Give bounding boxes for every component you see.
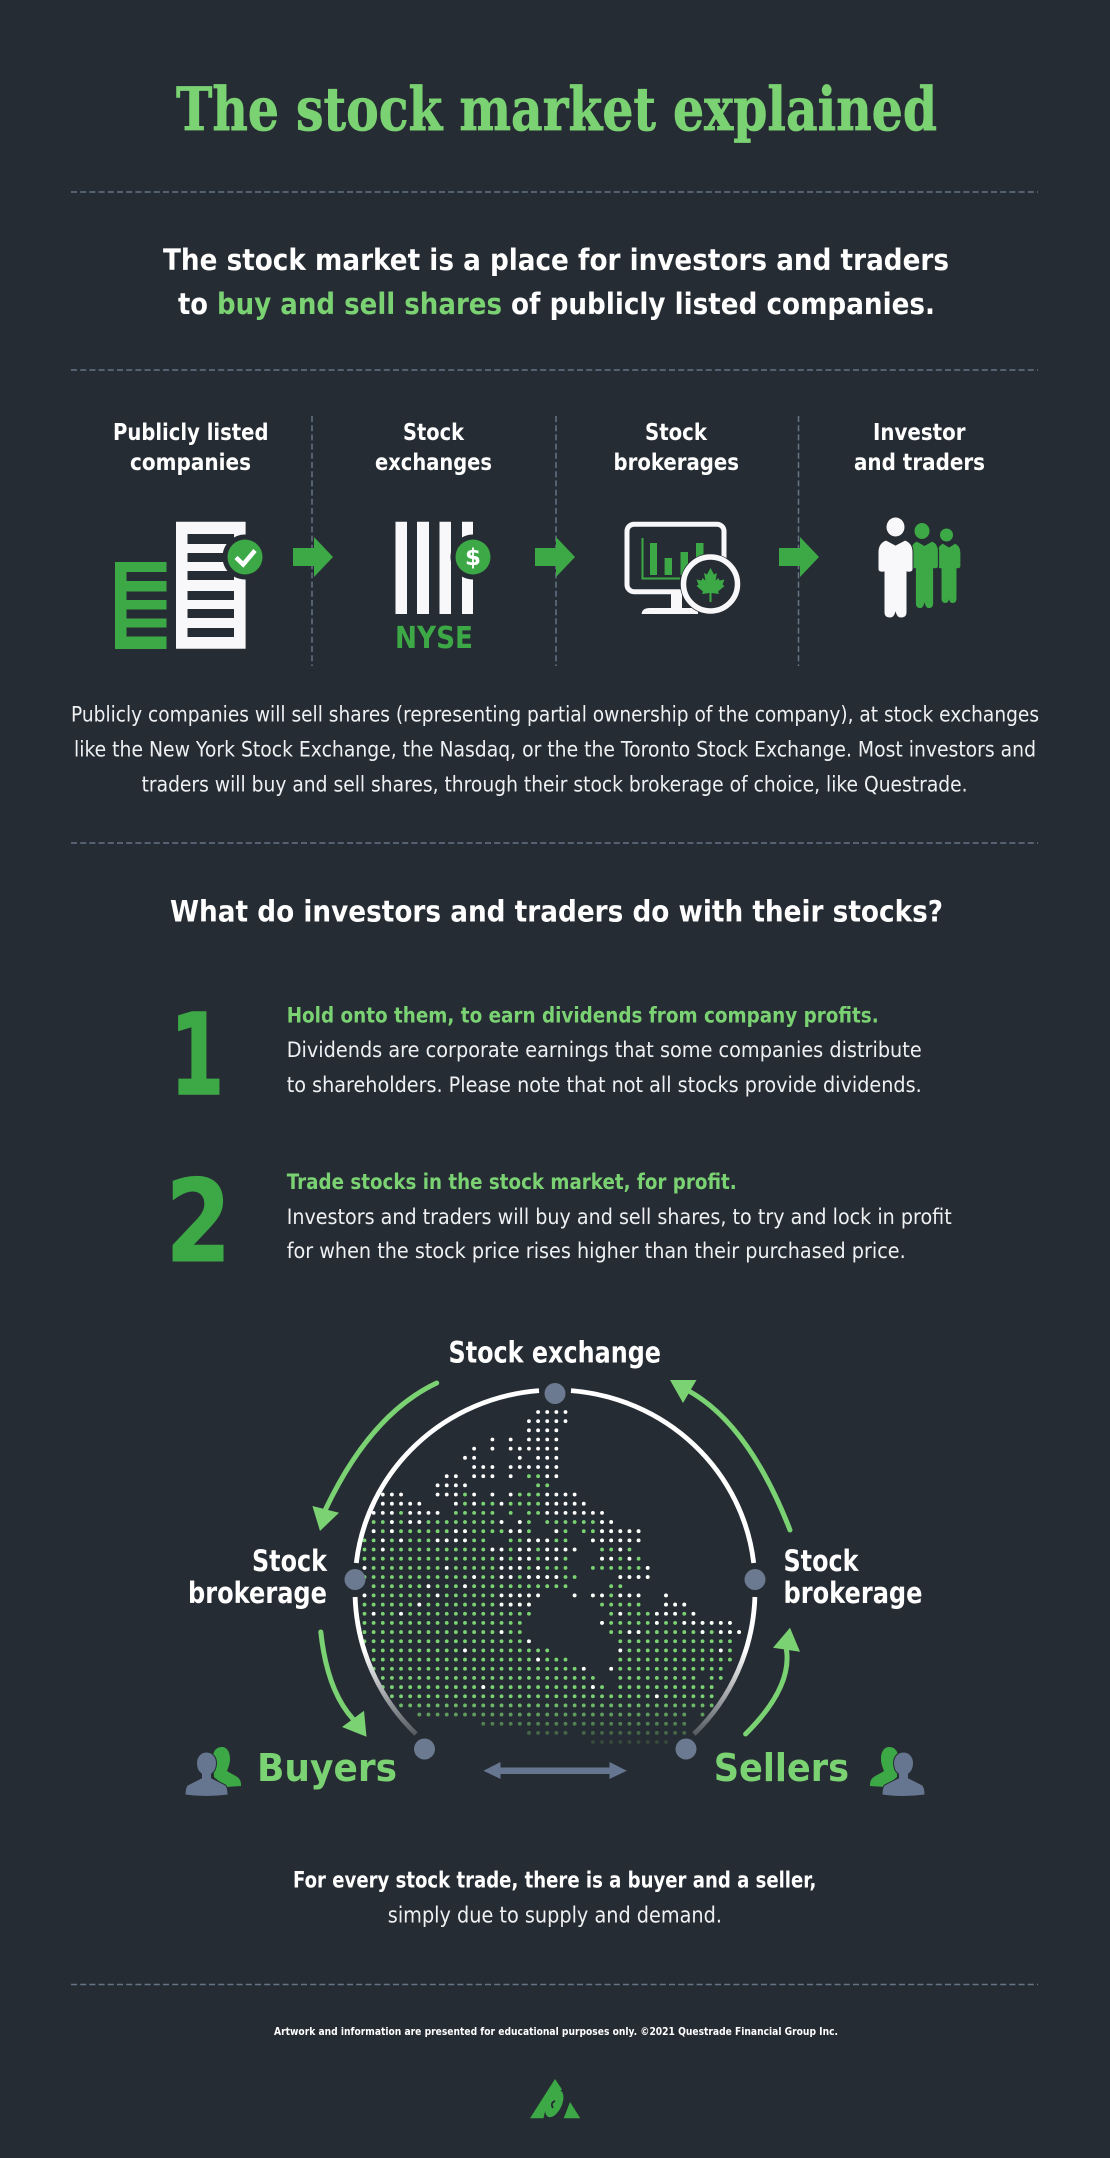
icon: company buildings with check (115, 522, 268, 649)
logo (530, 2079, 580, 2120)
icon: NYSE exchange columns: $ (465, 545, 481, 571)
number 2: 2 (166, 1155, 231, 1288)
panel: flow from companies to investors (113, 418, 985, 656)
node: right brokerage (744, 1569, 766, 1590)
heading: stock brokerages (614, 418, 739, 476)
item 2 text: Trade stocks in the stock market, for profit. (287, 1170, 737, 1194)
title: The stock market explained (176, 75, 937, 145)
heading: stock exchanges (375, 418, 492, 476)
arrow: left brokerage to buyers (321, 1632, 366, 1737)
heading: stock brokerages: Stock (645, 418, 708, 446)
icon: NYSE exchange columns: NYSE (395, 621, 473, 656)
intro statement: of publicly listed companies. (511, 287, 935, 321)
closing statement: For every stock trade, there is a buyer and a seller, (293, 1869, 816, 1894)
heading: investor and traders (854, 418, 985, 476)
heading: stock exchanges: Stock (403, 418, 465, 446)
label: left stock brokerage (188, 1544, 328, 1610)
label: right stock brokerage: Stock (784, 1544, 859, 1578)
heading: investor and traders: and traders (854, 448, 985, 476)
label: stock exchange: Stock exchange (448, 1336, 661, 1370)
intro statement: buy and sell shares (217, 287, 502, 321)
heading: publicly listed companies (113, 418, 268, 476)
item 2 text: for when the stock price rises higher than their purchased price. (287, 1239, 906, 1263)
explanatory paragraph (71, 703, 1039, 797)
heading: publicly listed companies: Publicly listed (113, 418, 268, 446)
arrow: exchange to left brokerage (312, 1383, 437, 1531)
heading: stock brokerages: brokerages (614, 448, 739, 476)
arrow (779, 537, 819, 577)
arrow (293, 537, 333, 577)
heading: publicly listed companies: companies (130, 448, 251, 476)
intro statement (163, 243, 949, 321)
intro statement: to (178, 287, 208, 321)
chart: stock trade cycle diagram (185, 1336, 925, 1796)
label: sellers: Sellers (714, 1746, 849, 1790)
dotted map of Canada (364, 1412, 740, 1742)
icon: buyers people (185, 1747, 241, 1796)
arrow: sellers to right brokerage (746, 1628, 800, 1734)
ring segments (355, 1391, 755, 1734)
item 2 text: Investors and traders will buy and sell shares, to try and lock in profit (287, 1205, 952, 1229)
arrow: right brokerage to exchange (670, 1380, 790, 1530)
item 1 text (287, 1004, 922, 1097)
footer disclaimer: Artwork and information are presented for educational purposes only. ©2021 Questrade Financial Group Inc. (274, 2025, 838, 2038)
explanatory paragraph: traders will buy and sell shares, through their stock brokerage of choice, like Questrade. (142, 773, 968, 797)
item 2 text (287, 1170, 952, 1263)
icon: investors and traders group (878, 518, 960, 618)
label: buyers: Buyers (257, 1746, 397, 1790)
item 1 text: to shareholders. Please note that not all stocks provide dividends. (287, 1073, 922, 1097)
label: right stock brokerage (784, 1544, 922, 1610)
heading: stock exchanges: exchanges (375, 448, 492, 476)
label: right stock brokerage: brokerage (784, 1576, 922, 1610)
icon: sellers people (870, 1747, 925, 1796)
arrow (535, 537, 575, 577)
node: stock exchange (544, 1383, 566, 1404)
intro statement: The stock market is a place for investors and traders (163, 243, 949, 277)
closing statement: simply due to supply and demand. (388, 1903, 722, 1928)
closing statement (293, 1869, 816, 1928)
node: buyers (414, 1738, 435, 1760)
label: left stock brokerage: brokerage (188, 1576, 327, 1610)
node: left brokerage (344, 1569, 366, 1590)
heading: investor and traders: Investor (873, 418, 966, 446)
item 1 text: Dividends are corporate earnings that some companies distribute (287, 1038, 922, 1062)
section heading: What do investors and traders do with their stocks? (170, 895, 943, 929)
arrow: two-way exchange (483, 1762, 627, 1779)
icon: brokerage monitor with maple leaf (627, 524, 741, 614)
node: sellers (676, 1738, 696, 1760)
icon: NYSE exchange columns (395, 522, 496, 656)
item 1 text: Hold onto them, to earn dividends from company profits. (287, 1004, 879, 1028)
number 1: 1 (170, 990, 224, 1121)
label: left stock brokerage: Stock (252, 1544, 328, 1578)
